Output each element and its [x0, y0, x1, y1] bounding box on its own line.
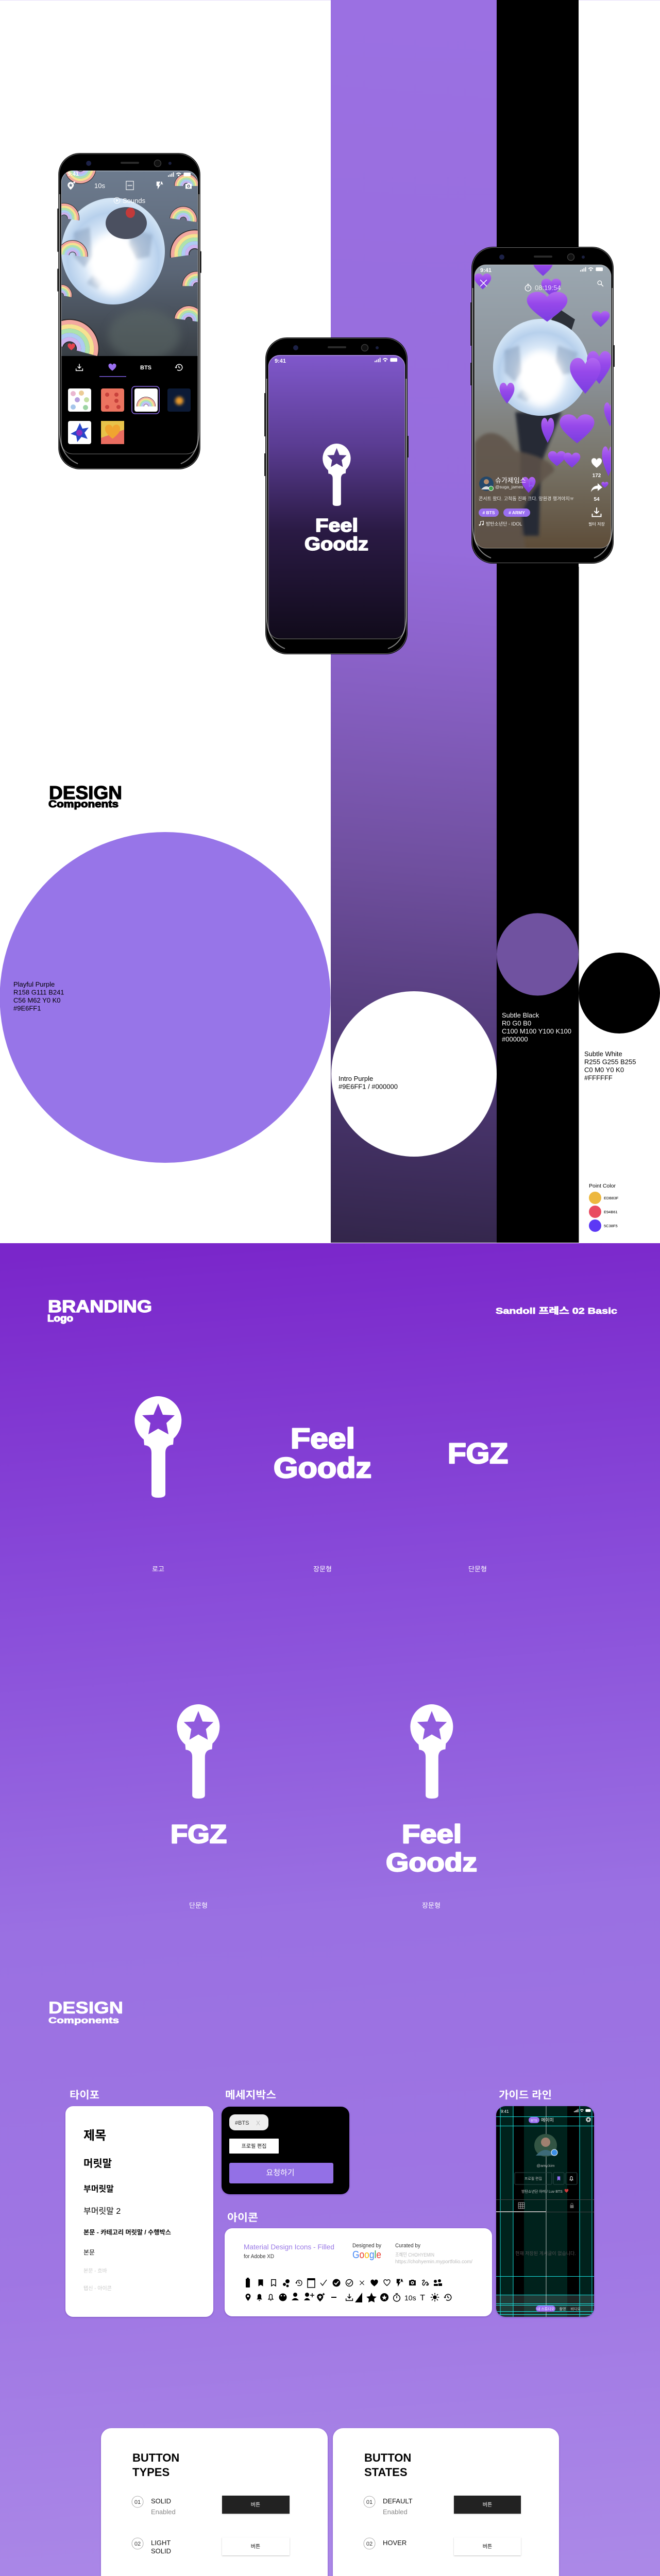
swatch: intro purple: Intro Purple	[339, 1075, 373, 1082]
logo: short wordmark: FGZ	[448, 1437, 508, 1469]
panel: guide line phone: 현재 저장된 게시글이 없습니다.	[515, 2250, 576, 2256]
panel: icons: Material Design Icons - Filled	[244, 2243, 334, 2251]
swatch: playful purple: C56 M62 Y0 K0	[13, 996, 61, 1004]
section labels: 아이콘	[227, 2212, 258, 2224]
phone: live feed with hearts	[470, 247, 616, 564]
icon rows: T	[420, 2294, 425, 2302]
panel: button states: 02	[366, 2541, 373, 2547]
swatch: playful purple: #9E6FF1	[13, 1005, 41, 1012]
camera top bar: Sounds	[123, 197, 146, 205]
feed user info	[479, 477, 574, 527]
panel: button types: 버튼	[251, 2544, 260, 2550]
logo: long wordmark: Goodz	[274, 1451, 371, 1484]
panel: black column	[497, 0, 579, 1243]
swatch: playful purple	[0, 832, 331, 1163]
heading: branding logo: Logo	[47, 1313, 73, 1324]
panel: message box: 요청하기	[266, 2168, 295, 2177]
feed actions: 필터 저장	[588, 521, 605, 527]
panel: typography: 본문 - 흐바	[83, 2268, 107, 2274]
swatch: subtle white: Subtle White	[584, 1050, 622, 1058]
panel: guide line phone	[496, 2106, 594, 2317]
section labels: 타이포	[70, 2089, 99, 2101]
heading: design components 2: Components	[48, 2015, 119, 2025]
logo: symbol with long wordmark	[386, 1704, 477, 1909]
panel: icons: for Adobe XD	[244, 2253, 274, 2260]
heading: design components: DESIGN	[49, 782, 122, 803]
panel: guide line phone: 9:41	[501, 2109, 509, 2114]
panel: typography	[65, 2106, 213, 2317]
logo: symbol	[134, 1396, 181, 1573]
swatch: intro purple	[331, 991, 497, 1157]
panel: guide line phone: 촬영	[560, 2307, 566, 2311]
feed top bar: 9:41	[480, 267, 492, 274]
heading: design components 2	[48, 1998, 123, 2025]
logo: symbol with short wordmark: 단문형	[189, 1902, 208, 1909]
panel: typography: 탭신 - 아이콘	[83, 2285, 112, 2292]
panel: icons: Curated by	[395, 2243, 420, 2249]
feed top bar	[480, 267, 603, 292]
swatch: subtle white: #FFFFFF	[584, 1074, 613, 1082]
panel: typography: 본문 - 카테고리 머릿말 / 수행박스	[83, 2228, 171, 2236]
point colors: EDB83F	[604, 1196, 619, 1200]
heading: design components 2: DESIGN	[48, 1998, 123, 2017]
panel: guide line phone: 방탄소년단 아미 / Luv BTS	[521, 2189, 563, 2194]
icon rows	[246, 2278, 451, 2302]
panel: button states: 버튼	[483, 2544, 492, 2550]
swatch: playful purple: Playful Purple	[13, 980, 55, 988]
point colors: E94B61	[604, 1210, 618, 1214]
panel: button types: Enabled	[151, 2508, 176, 2516]
panel: guide line phone: @amy.kim	[537, 2163, 554, 2168]
panel: icons: https://chohyemin.myportfolio.com/	[395, 2259, 472, 2265]
panel: button types: BUTTON	[132, 2451, 179, 2464]
panel: icons: Google	[352, 2249, 381, 2261]
panel: guide line phone: BTS	[531, 2119, 537, 2123]
panel: button types	[101, 2428, 328, 2576]
panel: button states: HOVER	[383, 2539, 407, 2547]
panel: icons: Designed by	[352, 2243, 381, 2249]
panel: button states	[333, 2428, 559, 2576]
swatch: subtle white: C0 M0 Y0 K0	[584, 1066, 624, 1074]
logo: symbol with short wordmark	[171, 1704, 227, 1909]
feed user info: @suga_james	[495, 484, 523, 489]
icon rows: 10s	[404, 2294, 416, 2302]
logo: symbol with long wordmark: Goodz	[386, 1848, 477, 1877]
heading: branding logo	[47, 1297, 152, 1324]
swatch: subtle black	[497, 913, 579, 1043]
feed user info: 콘서트 왔다. 고척돔 진짜 크다. 망원경 챙겨야지ㅠ	[479, 496, 574, 501]
panel: typography: 제목	[83, 2129, 106, 2143]
section labels	[70, 2089, 552, 2224]
logo: long wordmark	[274, 1422, 371, 1573]
sticker tabs	[76, 364, 182, 377]
camera top bar: 9:41	[67, 171, 79, 177]
feed actions: 54	[594, 497, 600, 502]
panel: message box	[222, 2107, 349, 2194]
swatch: intro purple: #9E6FF1 / #000000	[339, 1083, 398, 1090]
panel: icons	[225, 2228, 492, 2316]
panel: button types: LIGHT	[151, 2539, 171, 2547]
feed user info: 방탄소년단 - IDOL	[486, 521, 522, 527]
panel: purple gradient column	[331, 0, 497, 1243]
heading: branding logo: BRANDING	[48, 1297, 152, 1316]
sticker tabs: BTS	[140, 365, 151, 371]
panel: button types: SOLID	[151, 2547, 171, 2555]
sticker thumbnails	[68, 386, 191, 444]
intro wordmark: Goodz	[304, 533, 368, 554]
intro wordmark	[304, 515, 368, 554]
swatch: subtle black: C100 M100 Y100 K100	[502, 1027, 571, 1035]
panel: icons: 조혜민 CHOHYEMIN	[395, 2252, 434, 2258]
intro logo	[323, 444, 351, 506]
panel: guide line phone: 내 스튜디오	[537, 2307, 555, 2311]
section labels: 메세지박스	[225, 2089, 276, 2101]
panel: guide line phone: 에이미	[541, 2117, 554, 2123]
panel: branding background	[0, 1243, 660, 2576]
font name: Sandoll 프레스 02 Basic	[496, 1306, 617, 1316]
panel: guide line phone: 프로필 편집	[524, 2176, 542, 2181]
point colors	[589, 1183, 619, 1232]
logo: symbol: 로고	[152, 1565, 164, 1573]
panel: message box: 프로필 편집	[242, 2143, 266, 2149]
swatch: subtle black: #000000	[502, 1036, 528, 1043]
panel: typography: 본문	[83, 2249, 95, 2256]
feed actions	[588, 458, 605, 527]
logo: symbol with long wordmark: Feel	[402, 1820, 462, 1849]
panel: typography: 부머릿말	[83, 2184, 114, 2194]
feed top bar: 08:19:54	[535, 284, 561, 292]
panel: guide line phone: 비디오	[570, 2307, 581, 2311]
phone: camera with rainbow stickers	[57, 153, 201, 469]
logo: long wordmark: Feel	[291, 1422, 355, 1454]
logo: symbol with short wordmark: FGZ	[171, 1820, 227, 1849]
feed user info: # BTS	[482, 510, 495, 515]
panel: button types: TYPES	[132, 2466, 170, 2479]
feed user info: 슈가제임스	[495, 477, 526, 484]
swatch: playful purple: R158 G111 B241	[13, 988, 64, 996]
panel: button states: BUTTON	[364, 2451, 411, 2464]
panel: typography: 부머릿말 2	[83, 2207, 121, 2216]
section labels: 가이드 라인	[499, 2089, 552, 2101]
intro wordmark: Feel	[315, 515, 358, 536]
panel: message box: #BTS	[235, 2120, 249, 2126]
swatch: subtle white: R255 G255 B255	[584, 1058, 636, 1065]
panel: button types: 01	[134, 2499, 141, 2505]
camera top bar: 10s	[94, 182, 105, 190]
camera top bar	[67, 171, 192, 205]
logo: symbol with long wordmark: 장문형	[422, 1902, 441, 1909]
swatch: subtle white	[579, 953, 660, 1082]
logo: short wordmark	[448, 1437, 508, 1573]
panel: typography: 머릿말	[83, 2158, 112, 2170]
panel: button states: Enabled	[383, 2508, 408, 2516]
swatch: subtle black: R0 G0 B0	[502, 1019, 531, 1027]
panel: message box: X	[256, 2120, 260, 2127]
feed actions: 172	[593, 473, 601, 479]
point colors: Point Color	[589, 1183, 616, 1189]
feed user info: # ARMY	[509, 510, 525, 515]
panel: button types: SOLID	[151, 2497, 171, 2505]
panel: button states: STATES	[364, 2466, 408, 2479]
panel: button types: 버튼	[251, 2502, 260, 2508]
panel: button states: 01	[366, 2499, 373, 2505]
logo: long wordmark: 장문형	[313, 1565, 332, 1573]
panel: button states: 버튼	[483, 2502, 492, 2508]
point colors: 5C38F5	[604, 1224, 618, 1228]
swatch: subtle black: Subtle Black	[502, 1011, 539, 1019]
logo: short wordmark: 단문형	[468, 1565, 487, 1573]
phone: intro screen	[264, 337, 409, 654]
panel: button types: 02	[134, 2541, 141, 2547]
phone: intro screen: 9:41	[275, 358, 286, 364]
panel: button states: DEFAULT	[383, 2497, 413, 2505]
heading: design components: Components	[48, 799, 119, 810]
